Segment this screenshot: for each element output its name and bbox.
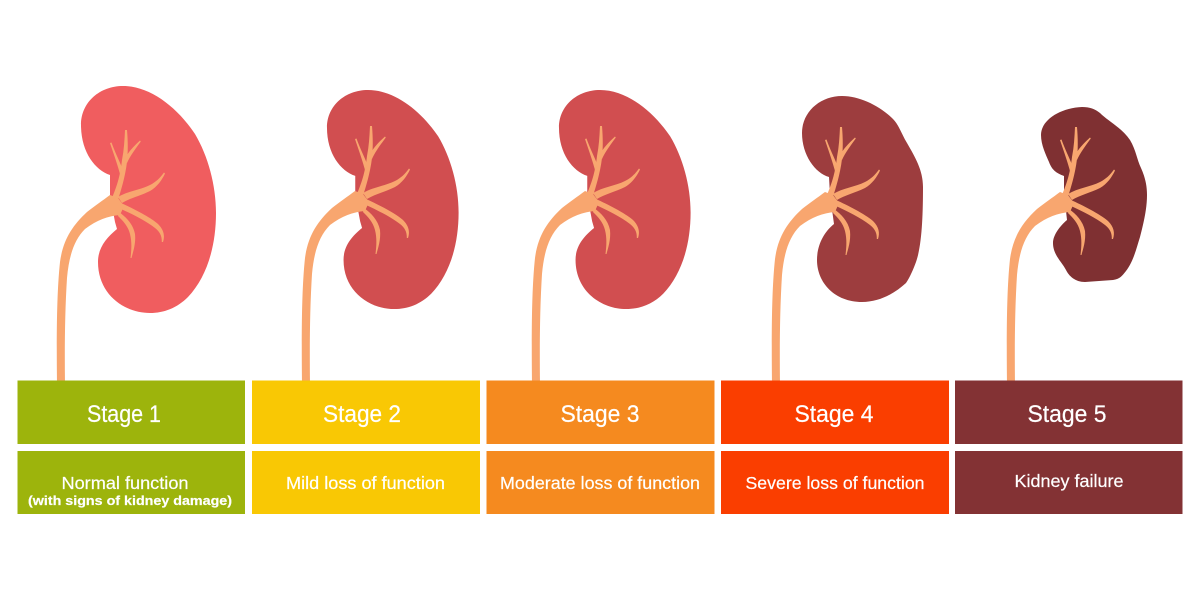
stage 5 header bbox=[955, 380, 1182, 444]
stage 2 description: Mild loss of function bbox=[286, 473, 445, 493]
stage 1 description: Normal function bbox=[62, 473, 188, 493]
stage 2 header bbox=[252, 380, 480, 444]
stage 4 description: Severe loss of function bbox=[746, 473, 924, 493]
kidney body bbox=[81, 86, 216, 313]
stage 3 description bbox=[486, 451, 714, 514]
stage 3 description: Moderate loss of function bbox=[500, 473, 700, 493]
stage 1 header: Stage 1 bbox=[87, 401, 161, 428]
stage 2 header: Stage 2 bbox=[323, 401, 401, 428]
ureter and branches bbox=[532, 126, 640, 385]
stage 5 description bbox=[955, 451, 1182, 514]
stage 5 header: Stage 5 bbox=[1028, 401, 1106, 428]
kidney body bbox=[802, 96, 923, 302]
ureter and branches bbox=[57, 130, 165, 385]
kidney body bbox=[559, 90, 691, 309]
ureter and branches bbox=[302, 126, 410, 385]
kidney body bbox=[1041, 107, 1147, 282]
ureter and branches bbox=[772, 127, 880, 385]
stage 2 description bbox=[252, 451, 480, 514]
stage 5 description: Kidney failure bbox=[1014, 471, 1124, 491]
stage 4 description bbox=[721, 451, 949, 514]
stage 4 header: Stage 4 bbox=[794, 401, 874, 428]
stage 1 description: (with signs of kidney damage) bbox=[28, 493, 232, 508]
stage 1 header bbox=[18, 380, 245, 444]
stage 3 header bbox=[486, 380, 714, 444]
kidney stage 3 bbox=[532, 90, 691, 385]
kidney stage 1 bbox=[57, 86, 216, 385]
kidney body bbox=[327, 90, 459, 309]
stage 4 header bbox=[721, 380, 949, 444]
stage 3 header: Stage 3 bbox=[560, 401, 640, 428]
kidney stage 4 bbox=[772, 96, 923, 385]
kidney stage 5 bbox=[1007, 107, 1147, 385]
stage 1 description bbox=[18, 451, 245, 514]
kidney stage 2 bbox=[302, 90, 459, 385]
ureter and branches bbox=[1007, 127, 1115, 385]
